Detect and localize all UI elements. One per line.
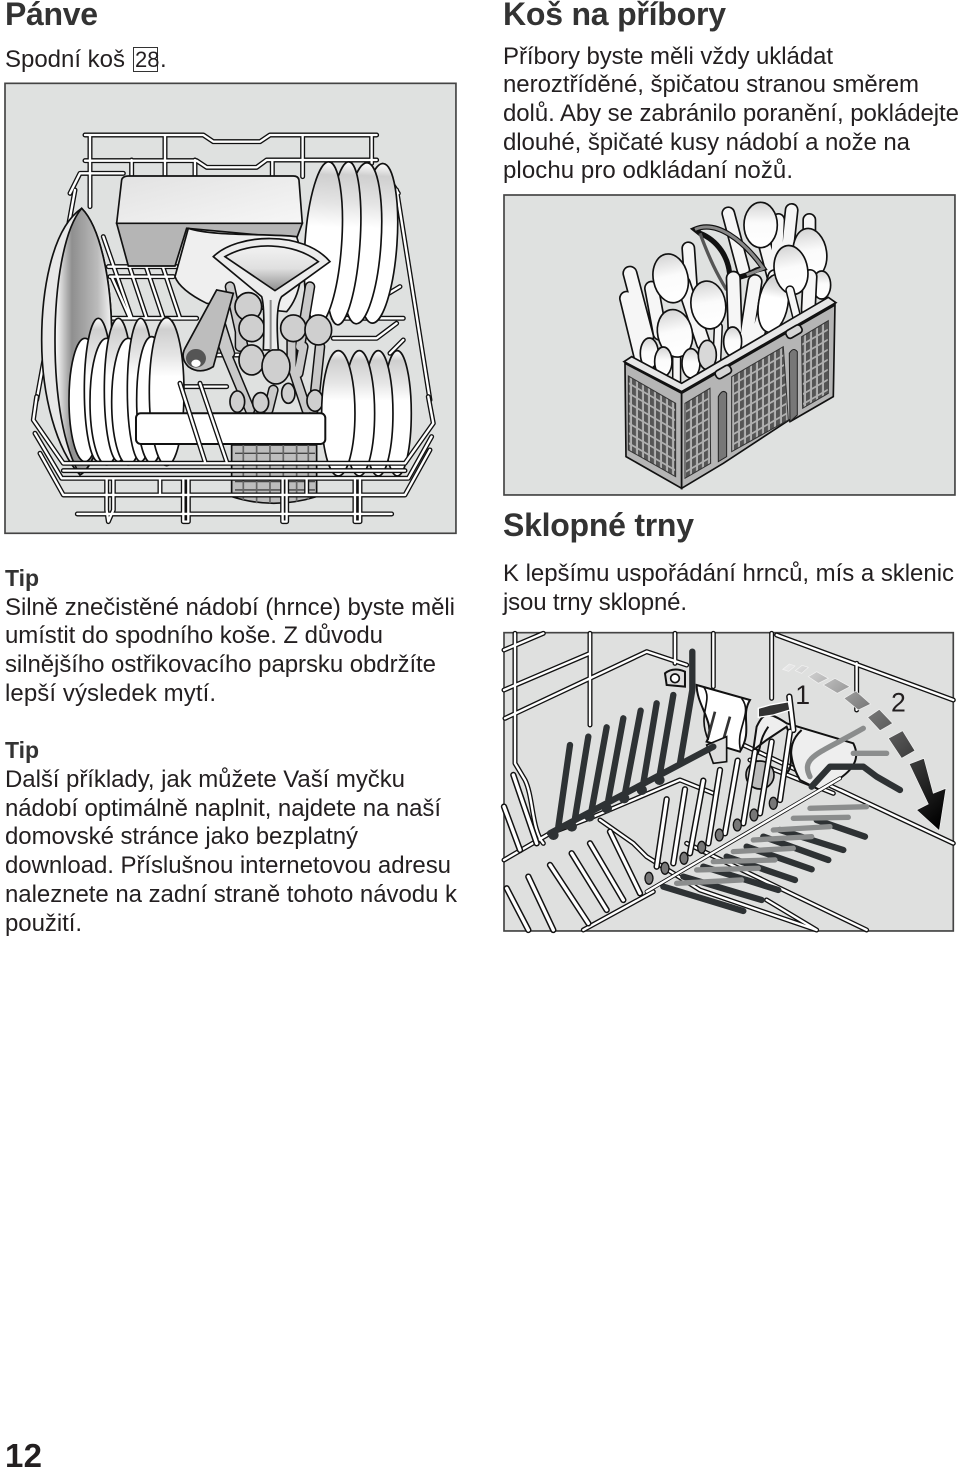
rectangular casserole xyxy=(117,176,302,266)
rack wires xyxy=(504,633,953,930)
cutlery in basket xyxy=(217,287,332,413)
text: Spodní koš 28: . xyxy=(160,46,167,73)
plates upper right xyxy=(299,161,402,326)
tip 2: nádobí optimálně naplnit, najdete na naší xyxy=(5,795,441,822)
tip 1 xyxy=(5,565,455,707)
tip 1: lepší výsledek mytí. xyxy=(5,680,216,707)
arrow 2 xyxy=(783,664,946,831)
text: cutlery instructions xyxy=(503,43,959,184)
text: folding tines description: K lepšímu uspořádání hrnců, mís a sklenic xyxy=(503,560,954,587)
white lower tines xyxy=(504,775,640,930)
text: folding tines description xyxy=(502,560,954,616)
tip 2: download. Příslušnou internetovou adresu xyxy=(5,852,451,879)
text: cutlery instructions: dlouhé, špičaté kusy nádobí a nože na xyxy=(503,129,911,156)
rack back wires xyxy=(37,135,430,400)
tip 2: naleznete na zadní straně tohoto návodu k xyxy=(5,881,458,908)
arrow 1 xyxy=(758,702,790,717)
tip 2: použití. xyxy=(5,910,82,937)
dark upright tines xyxy=(550,652,713,835)
white upright tines xyxy=(657,697,793,867)
pot xyxy=(175,228,301,312)
label 2: 2 xyxy=(891,688,906,718)
tine pivot bar xyxy=(647,778,840,892)
white holder bar xyxy=(136,413,325,444)
text: cutlery instructions: dolů. Aby se zabránilo poranění, pokládejte xyxy=(503,100,959,127)
text: cutlery instructions: neroztříděné, špičatou stranou směrem xyxy=(503,71,919,98)
fan-shaped utensil xyxy=(213,239,330,350)
text: folding tines description: jsou trny sklopné. xyxy=(502,589,687,616)
serving utensil xyxy=(695,227,763,290)
tip 1: silnějšího ostřikovacího paprsku obdržíte xyxy=(5,651,436,678)
reference number box: 28 xyxy=(135,47,159,72)
cutlery back row xyxy=(688,202,831,299)
basket body xyxy=(624,297,836,488)
tip 2 xyxy=(5,737,458,937)
basket at bottom centre xyxy=(232,445,317,503)
large platter xyxy=(42,208,112,475)
text: cutlery instructions: Příbory byste měli vždy ukládat xyxy=(503,43,833,70)
text: Spodní koš 28: Spodní koš xyxy=(5,46,125,73)
grey folded tines xyxy=(677,728,887,883)
text: cutlery instructions: plochu pro odkládaní nožů. xyxy=(503,157,793,184)
heading: Sklopné trny: Sklopné trny xyxy=(503,507,694,543)
tip 2: Další příklady, jak můžete Vaší myčku xyxy=(5,766,405,793)
pot handle xyxy=(183,290,233,371)
label 1: 1 xyxy=(795,680,810,710)
tip 1: umístit do spodního koše. Z důvodu xyxy=(5,622,383,649)
hinge clips xyxy=(665,670,856,790)
panel: cutlery basket illustration xyxy=(504,195,955,495)
plates lower right xyxy=(322,351,411,476)
cutlery handles and spoons xyxy=(627,243,812,387)
panel: lower rack illustration with pans and plates xyxy=(5,83,456,533)
tip 2: domovské stránce jako bezplatný xyxy=(5,823,358,850)
panel: folding tines illustration xyxy=(504,633,953,931)
hinge lumps along pivot bar xyxy=(645,797,777,884)
dark folded tines xyxy=(663,767,900,911)
tip 2: Tip xyxy=(5,737,39,763)
plates left xyxy=(69,318,184,466)
tip 1: Tip xyxy=(5,565,39,591)
rack front wires xyxy=(33,383,433,522)
tip 1: Silně znečistěné nádobí (hrnce) byste měli xyxy=(5,594,455,621)
